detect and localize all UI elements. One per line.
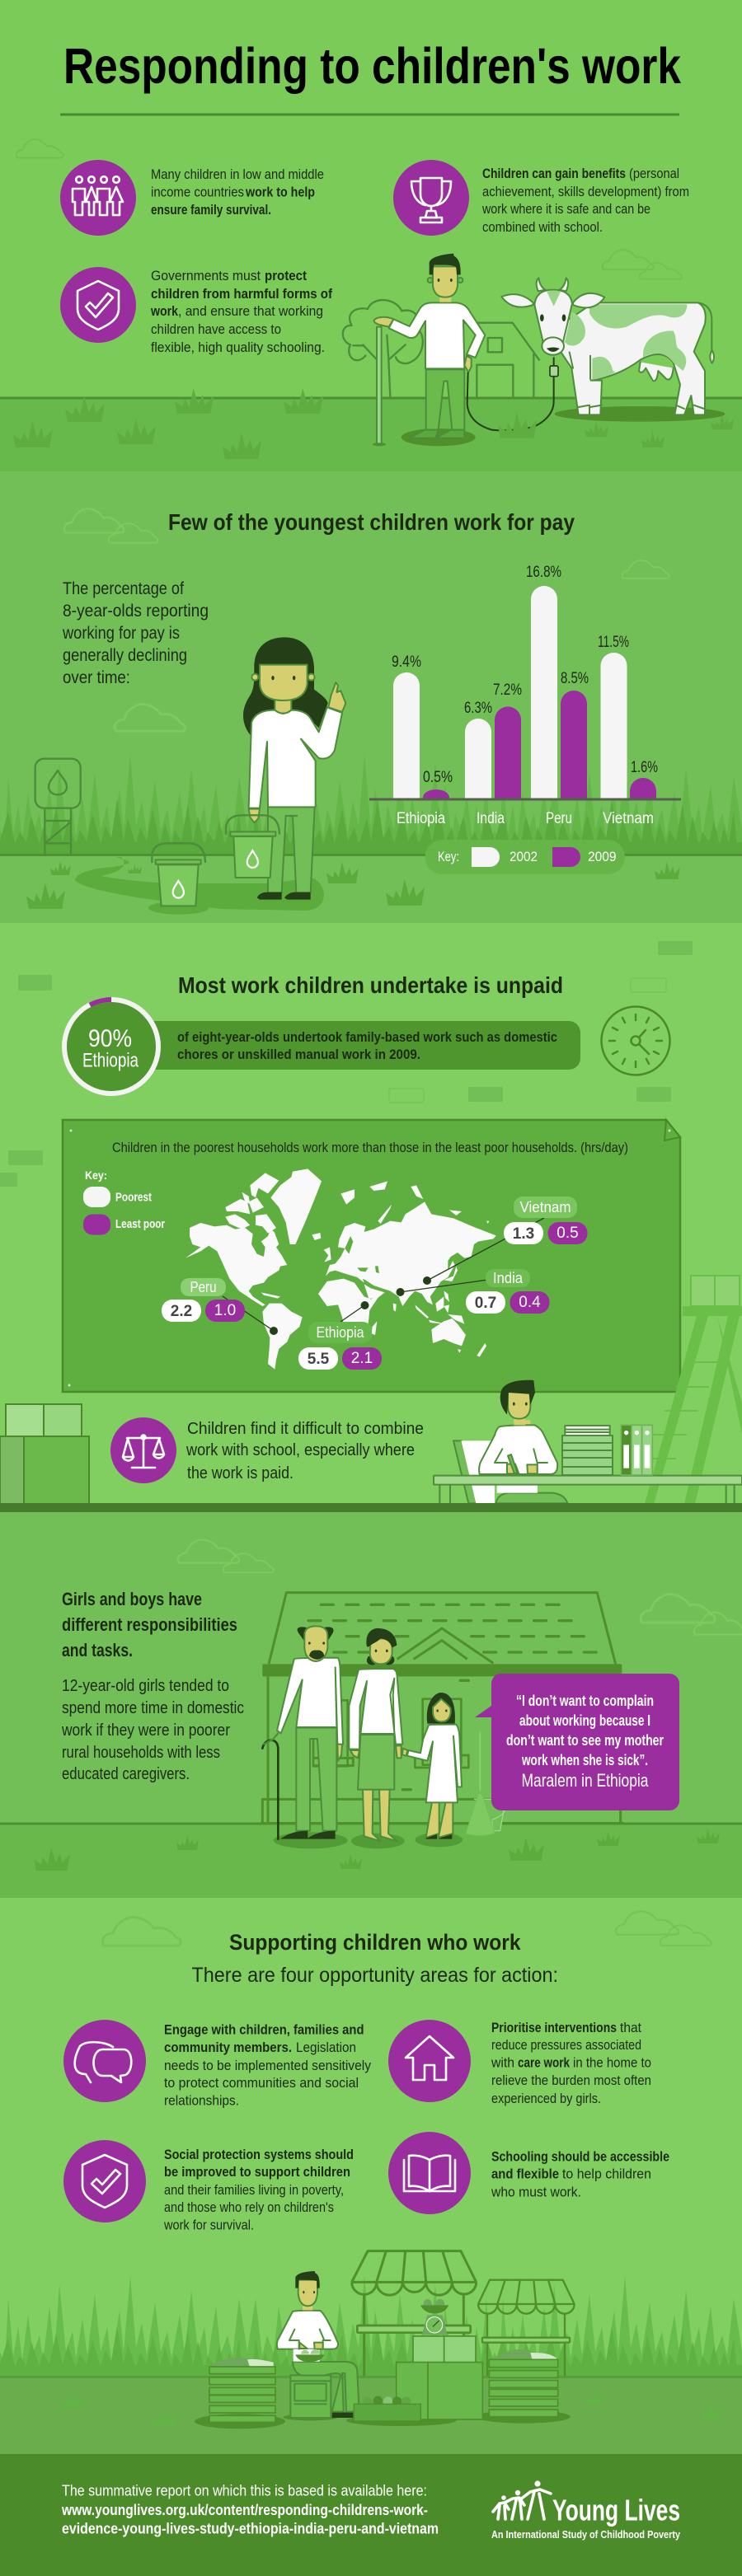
text: engage: Engage with children, families and <box>164 2022 364 2037</box>
text: schooling: Schooling should be accessible <box>491 2149 669 2164</box>
text: schooling: who must work. <box>491 2185 581 2200</box>
grass band: section five <box>0 2276 742 2378</box>
farmer shirt <box>389 302 485 368</box>
text: prioritise: relieve the burden most often <box>491 2073 651 2088</box>
text: girls and boys: 12-year-old girls tended to <box>62 1677 229 1695</box>
water tower <box>35 759 81 855</box>
text: percentage of 8-year-olds: working for pay is <box>62 624 180 643</box>
quote bubble: “I don’t want to complain <box>516 1692 654 1709</box>
map seas <box>345 1236 453 1273</box>
footer text <box>61 2482 439 2536</box>
text: prioritise: that <box>620 2021 641 2035</box>
text: prioritise: in the home to <box>573 2055 651 2070</box>
logo: Young Lives <box>491 2480 681 2541</box>
tree <box>343 300 423 397</box>
text: difficult to combine: Children find it difficult to combine <box>187 1419 424 1438</box>
icon: shield check <box>63 2140 146 2222</box>
text: protect children <box>150 269 332 355</box>
label: Ethiopia: Ethiopia <box>317 1324 364 1341</box>
icon: shield <box>60 267 136 343</box>
grandfather <box>262 1626 343 1839</box>
cow outline details <box>570 352 590 379</box>
illustration: house and family <box>261 1593 624 1848</box>
clouds: intro <box>16 139 682 279</box>
desk <box>434 1476 742 1503</box>
heading: supporting children: There are four opportunity areas for action: <box>191 1964 558 1987</box>
text: family survival <box>151 167 324 218</box>
label: India: India <box>493 1270 524 1286</box>
text: prioritise: experienced by girls. <box>491 2091 601 2106</box>
grass tufts: intro <box>13 388 734 459</box>
text: percentage of 8-year-olds: generally declining <box>63 646 187 665</box>
girl shoes <box>257 892 311 900</box>
value labels: 11.5% <box>598 634 629 651</box>
text: social protection: and those who rely on children's <box>164 2200 334 2215</box>
grass tufts: section four <box>34 1829 720 1871</box>
background bricks: section three <box>0 941 693 1187</box>
text: engage: needs to be implemented sensitively <box>164 2058 372 2073</box>
text: family survival: income countries <box>151 185 244 199</box>
shadows <box>195 2410 571 2428</box>
stall frame small <box>478 2280 575 2376</box>
callout: 90 percent Ethiopia: 90% <box>88 1025 132 1052</box>
text: girls and boys: and tasks. <box>62 1640 133 1660</box>
label: Vietnam <box>504 1197 587 1244</box>
text: girls and boys: different responsibilities <box>62 1614 237 1635</box>
text: social protection: work for survival. <box>163 2218 254 2233</box>
mother <box>349 1628 402 1841</box>
cow shadow <box>555 406 725 422</box>
text: protect children: , and ensure that working <box>178 304 323 319</box>
chart key: 2002 <box>510 849 538 864</box>
cow head <box>537 278 568 291</box>
label: Ethiopia <box>298 1322 382 1370</box>
icon: scales <box>110 1417 176 1483</box>
label: Peru <box>162 1278 245 1322</box>
text: girls and boys: educated caregivers. <box>62 1765 190 1783</box>
icon: running figures <box>493 2480 551 2519</box>
text: schooling: to help children <box>562 2167 651 2182</box>
post <box>373 443 386 446</box>
map board <box>63 1120 680 1392</box>
barn <box>464 323 539 397</box>
farmer head <box>439 295 451 302</box>
text: prioritise: Prioritise interventions <box>491 2021 617 2035</box>
logo: Young Lives: An International Study of Childhood Poverty <box>491 2528 681 2541</box>
quote bubble: work when she is sick”. <box>521 1751 648 1768</box>
girl hands <box>328 682 345 712</box>
text: family survival: ensure family survival. <box>151 203 271 218</box>
student hands <box>507 1464 519 1473</box>
clouds: section two <box>64 508 669 731</box>
text: schooling: and flexible <box>491 2167 559 2182</box>
logo: Young Lives: Young Lives <box>552 2494 680 2527</box>
icon: family of four <box>60 160 136 236</box>
text: girls and boys: rural households with less <box>62 1744 220 1762</box>
binders <box>621 1425 652 1475</box>
country labels: Vietnam <box>603 810 654 827</box>
label: Vietnam: 0.5 <box>556 1225 579 1242</box>
cow spots <box>565 304 687 380</box>
text: protect children: flexible, high quality schooling. <box>151 340 325 355</box>
text: family survival: Many children in low and middle <box>151 167 324 182</box>
farmer trousers <box>426 369 464 430</box>
chart key <box>425 840 625 874</box>
house <box>262 1593 621 1823</box>
value labels: 1.6% <box>631 759 658 776</box>
title <box>60 38 681 115</box>
heading: most work unpaid: Most work children undertake is unpaid <box>178 972 563 998</box>
label: India <box>466 1269 549 1314</box>
held bucket <box>226 815 279 834</box>
text: prioritise <box>491 2021 651 2106</box>
map key: Poorest <box>115 1192 152 1205</box>
text: benefits: Children can gain benefits <box>482 166 626 181</box>
icon: speech bubbles <box>63 2020 146 2102</box>
map board: Children in the poorest households work more than those in the least poor households. (hrs/day) <box>112 1140 628 1155</box>
girl hair <box>243 637 328 735</box>
icon: clock <box>602 1007 669 1075</box>
callout: 90 percent Ethiopia: of eight-year-olds undertook family-based work such as domestic <box>177 1029 557 1045</box>
label: Peru: 2.2 <box>171 1303 192 1320</box>
quote bubble: about working because I <box>519 1712 650 1729</box>
footer text: The summative report on which this is based is available here: <box>62 2482 427 2499</box>
label: Ethiopia: 5.5 <box>308 1351 330 1368</box>
storage boxes <box>0 1404 89 1504</box>
quote bubble: Maralem in Ethiopia <box>521 1770 649 1791</box>
text: protect children: protect <box>265 269 307 283</box>
cow tail <box>698 302 711 350</box>
heading: supporting children <box>191 1930 558 1987</box>
chair <box>453 1440 477 1503</box>
text: social protection: Social protection systems should <box>164 2147 354 2162</box>
girl neck and face <box>251 674 258 681</box>
callout: 90 percent Ethiopia: Ethiopia <box>82 1050 139 1071</box>
text: engage <box>164 2022 372 2108</box>
label: India: 0.7 <box>475 1295 496 1312</box>
text: benefits: (personal <box>629 166 679 181</box>
country labels: India <box>477 810 505 827</box>
clouds: section five <box>102 1911 711 1946</box>
farmer shadow <box>402 429 476 446</box>
daughter <box>402 1693 462 1839</box>
cow body <box>561 302 706 415</box>
map key: Least poor <box>115 1218 165 1231</box>
ground bucket <box>148 843 209 915</box>
path and grass tufts: section two <box>26 857 680 911</box>
text: engage: Legislation <box>296 2040 356 2055</box>
text: engage: relationships. <box>164 2093 239 2108</box>
country labels: Peru <box>546 810 572 827</box>
clouds: section four <box>178 1539 742 1635</box>
icon: trophy <box>393 160 469 236</box>
illustration: student at desk <box>434 1380 742 1503</box>
stall frame large <box>352 2251 477 2376</box>
value labels: 0.5% <box>423 769 453 786</box>
seller legs and stool <box>290 2362 359 2418</box>
label: India: 0.4 <box>519 1294 541 1311</box>
footer text: evidence-young-lives-study-ethiopia-india-peru-and-vietnam <box>62 2520 439 2536</box>
text: percentage of 8-year-olds: The percentage of <box>63 579 184 598</box>
grass band: section two <box>0 754 742 856</box>
text: percentage of 8-year-olds: over time: <box>63 668 130 687</box>
text: social protection: be improved to support children <box>164 2165 350 2180</box>
seller torso <box>277 2271 338 2362</box>
text: girls and boys <box>61 1589 244 1783</box>
girl trousers <box>268 807 315 892</box>
bars <box>393 586 627 799</box>
text: benefits: achievement, skills development) from <box>482 185 689 199</box>
rope <box>467 357 554 430</box>
illustration: market stall and seller <box>195 2251 575 2428</box>
left crate <box>209 2358 275 2422</box>
text: family survival: work to help <box>245 185 315 199</box>
world map <box>186 1169 496 1370</box>
map key <box>83 1169 165 1234</box>
grass tufts: section five <box>60 2391 721 2425</box>
shadows <box>274 1832 463 1848</box>
text: difficult to combine: work with school, especially where <box>186 1440 415 1459</box>
value labels: 9.4% <box>392 653 421 671</box>
value labels: 16.8% <box>526 564 561 581</box>
text: prioritise: care work <box>518 2055 571 2070</box>
callout: 90 percent Ethiopia <box>64 1000 580 1094</box>
text: percentage of 8-year-olds: 8-year-olds reporting <box>63 602 209 621</box>
illustration: farmer, tree, barn and cow <box>343 254 725 446</box>
value labels <box>392 564 658 786</box>
bar chart: children working for pay <box>369 564 681 827</box>
country labels: Ethiopia <box>397 810 445 827</box>
value labels: 8.5% <box>561 670 589 687</box>
value labels: 7.2% <box>493 681 522 699</box>
tuft at rope <box>498 412 537 438</box>
country labels <box>397 810 654 827</box>
quote bubble <box>475 1674 679 1810</box>
footer text: www.younglives.org.uk/content/responding-childrens-work- <box>61 2502 428 2518</box>
heading: supporting children: Supporting children who work <box>229 1930 521 1955</box>
icon: house <box>388 2020 471 2102</box>
text: protect children: Governments must <box>151 269 261 283</box>
floor strip <box>0 1503 742 1512</box>
shelf and ladder <box>641 1276 742 1504</box>
fruit tray <box>354 2396 420 2421</box>
callout: 90 percent Ethiopia: chores or unskilled manual work in 2009. <box>177 1047 420 1062</box>
text: percentage of 8-year-olds <box>62 579 209 687</box>
text: protect children: children have access to <box>151 322 281 337</box>
label: Vietnam: Vietnam <box>519 1199 571 1215</box>
text: girls and boys: work if they were in poorer <box>61 1721 230 1740</box>
text: protect children: children from harmful forms of <box>151 287 332 302</box>
label: Vietnam: 1.3 <box>513 1225 534 1243</box>
icon: open book <box>388 2132 471 2214</box>
text: difficult to combine: the work is paid. <box>187 1464 294 1482</box>
text: benefits: combined with school. <box>482 220 603 235</box>
text: benefits: work where it is safe and can be <box>481 202 650 217</box>
girl shirt <box>249 707 342 808</box>
weighing scale <box>420 2299 448 2335</box>
text: benefits <box>481 166 689 235</box>
text: social protection: and their families living in poverty, <box>164 2183 344 2198</box>
label: Peru: 1.0 <box>214 1302 236 1319</box>
chart key: Key: <box>438 849 459 864</box>
text: girls and boys: spend more time in domestic <box>62 1699 244 1717</box>
farmer hand <box>373 317 393 327</box>
leader lines <box>223 1218 544 1331</box>
label: Peru: Peru <box>190 1279 216 1295</box>
text: girls and boys: Girls and boys have <box>62 1589 202 1609</box>
text: schooling <box>491 2149 669 2200</box>
map key: Key: <box>85 1169 107 1182</box>
text: prioritise: with <box>491 2055 514 2070</box>
text: engage: to protect communities and social <box>164 2076 359 2091</box>
student torso <box>514 1420 530 1425</box>
books <box>562 1426 613 1475</box>
illustration: water tower, buckets and girl <box>35 637 345 915</box>
text: difficult to combine <box>186 1419 424 1482</box>
text: prioritise: reduce pressures associated <box>491 2038 641 2053</box>
broom and bucket <box>466 1732 506 1835</box>
label: Ethiopia: 2.1 <box>351 1350 373 1367</box>
student head <box>514 1419 525 1425</box>
value labels: 6.3% <box>464 700 492 717</box>
text: social protection <box>163 2147 354 2233</box>
heading: few of the youngest: Few of the youngest children work for pay <box>168 509 575 535</box>
quote bubble: don’t want to see my mother <box>506 1731 664 1749</box>
text: engage: community members. <box>164 2040 292 2055</box>
chart key: 2009 <box>588 849 617 864</box>
text: protect children: work <box>150 304 179 319</box>
boxes <box>397 2336 482 2419</box>
right crate <box>489 2349 558 2417</box>
